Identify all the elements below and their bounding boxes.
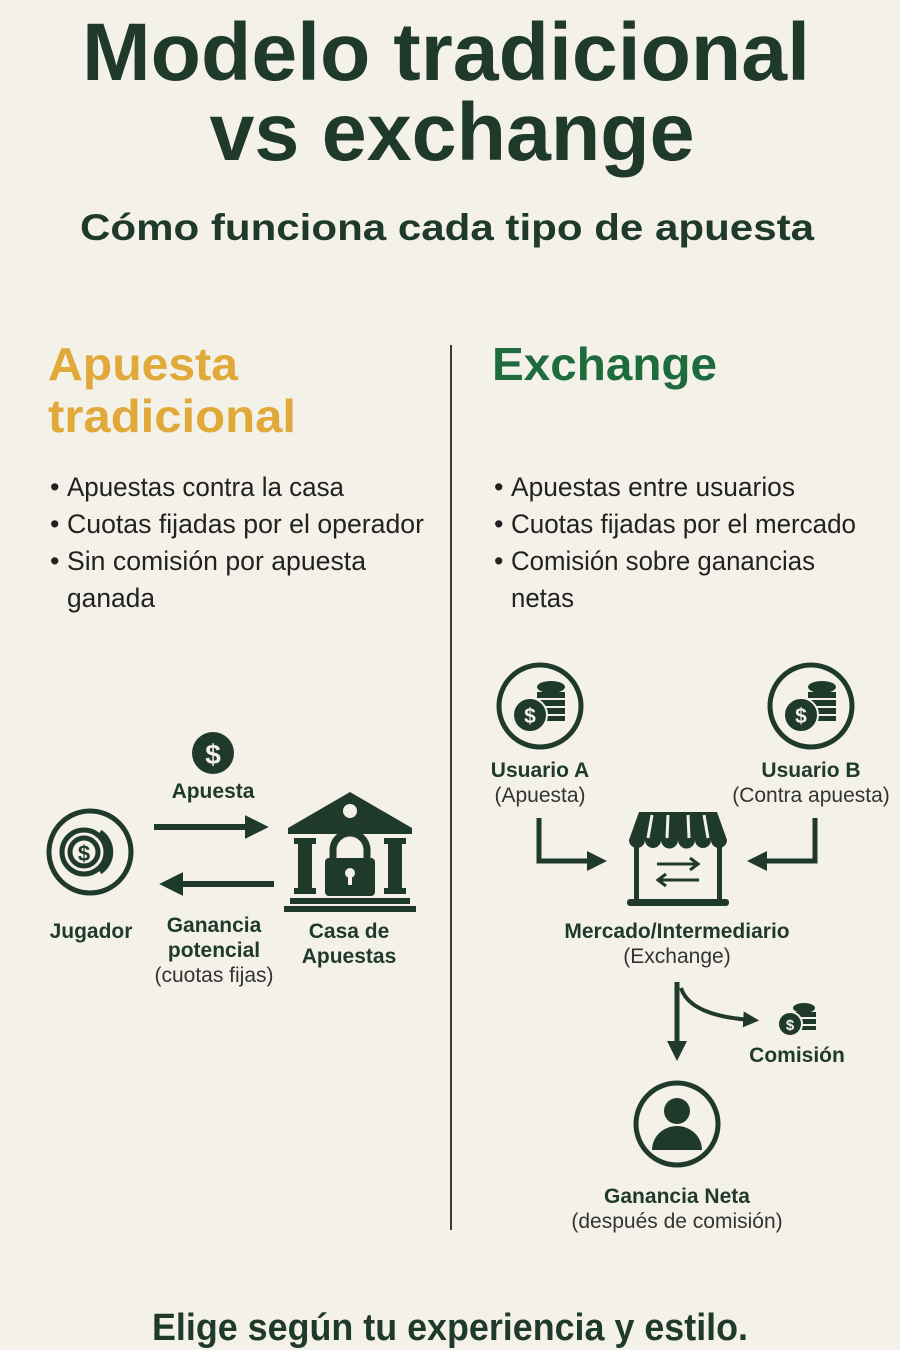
bullets: exchange: Cuotas fijadas por el mercado [511, 509, 856, 539]
bullets: exchange: netas [511, 583, 574, 613]
icon: usuario A: $ [524, 705, 536, 728]
bullets: traditional: • [50, 546, 59, 576]
bullets: traditional [50, 472, 424, 613]
icon: usuario B [770, 665, 852, 747]
label: Usuario A: Usuario A [491, 759, 589, 782]
arrow: to commission [681, 988, 752, 1020]
bullets: traditional: ganada [67, 583, 156, 613]
arrow: left [170, 881, 274, 887]
label: Ganancia potencial [154, 914, 274, 987]
bullets: exchange: Apuestas entre usuarios [511, 472, 795, 502]
bullets: traditional: • [50, 509, 59, 539]
bullets: traditional: Sin comisión por apuesta [67, 546, 367, 576]
icon: commission coins [778, 1003, 816, 1036]
footer: Elige según tu experiencia y estilo. [152, 1307, 748, 1349]
label: Usuario B: Usuario B [761, 759, 861, 782]
icon: usuario B: $ [795, 705, 807, 728]
icon: commission coins: $ [786, 1017, 795, 1034]
icon: jugador: $ [78, 841, 90, 866]
bullets: traditional: Cuotas fijadas por el operador [67, 509, 424, 539]
label: Mercado/Intermediario: (Exchange) [623, 945, 731, 968]
label: Usuario A [491, 759, 589, 807]
icon: dollar coin [192, 732, 234, 774]
heading: Apuesta tradicional: tradicional [48, 390, 296, 442]
bullets: exchange: • [494, 472, 503, 502]
icon: usuario A [499, 665, 581, 747]
label: Ganancia potencial: potencial [168, 939, 260, 962]
bullets: exchange: • [494, 509, 503, 539]
label: Casa de Apuestas: Apuestas [302, 945, 396, 968]
label: Ganancia Neta: Ganancia Neta [604, 1185, 750, 1208]
arrow: right [154, 824, 258, 830]
label: Comisión: Comisión [749, 1044, 845, 1067]
arrow: down [674, 982, 680, 1052]
bullets: traditional: • [50, 472, 59, 502]
icon: dollar coin: $ [205, 739, 221, 770]
label: Ganancia Neta [571, 1185, 783, 1233]
title: Modelo tradicional [82, 7, 810, 98]
title: vs exchange [210, 87, 694, 178]
label: Jugador: Jugador [50, 920, 132, 943]
label: Casa de Apuestas: Casa de [309, 920, 389, 943]
icon: bank [284, 792, 416, 912]
title [82, 7, 810, 178]
heading: Apuesta tradicional [48, 338, 296, 442]
label: Usuario B: (Contra apuesta) [732, 784, 890, 807]
label: Mercado/Intermediario [564, 920, 790, 968]
label: Apuesta: Apuesta [172, 780, 255, 803]
label: Usuario A: (Apuesta) [494, 784, 586, 807]
icon: jugador [49, 811, 131, 893]
bullets: exchange [494, 472, 856, 613]
label: Casa de Apuestas [302, 920, 396, 968]
label: Usuario B [732, 759, 890, 807]
label: Ganancia potencial: Ganancia [167, 914, 262, 937]
subtitle: Cómo funciona cada tipo de apuesta [80, 207, 814, 248]
bullets: traditional: Apuestas contra la casa [67, 472, 345, 502]
label: Ganancia Neta: (después de comisión) [571, 1210, 783, 1233]
heading: Exchange: Exchange [492, 338, 717, 390]
label: Mercado/Intermediario: Mercado/Intermediario [564, 920, 790, 943]
diagram: traditional [49, 732, 416, 987]
arrow: B to market [756, 818, 815, 861]
icon: market [627, 812, 729, 906]
bullets: exchange: Comisión sobre ganancias [511, 546, 815, 576]
heading: Apuesta tradicional: Apuesta [48, 338, 238, 390]
arrow: A to market [539, 818, 598, 861]
icon: person [636, 1083, 718, 1165]
label: Ganancia potencial: (cuotas fijas) [154, 964, 274, 987]
diagram: exchange [491, 665, 890, 1233]
bullets: exchange: • [494, 546, 503, 576]
